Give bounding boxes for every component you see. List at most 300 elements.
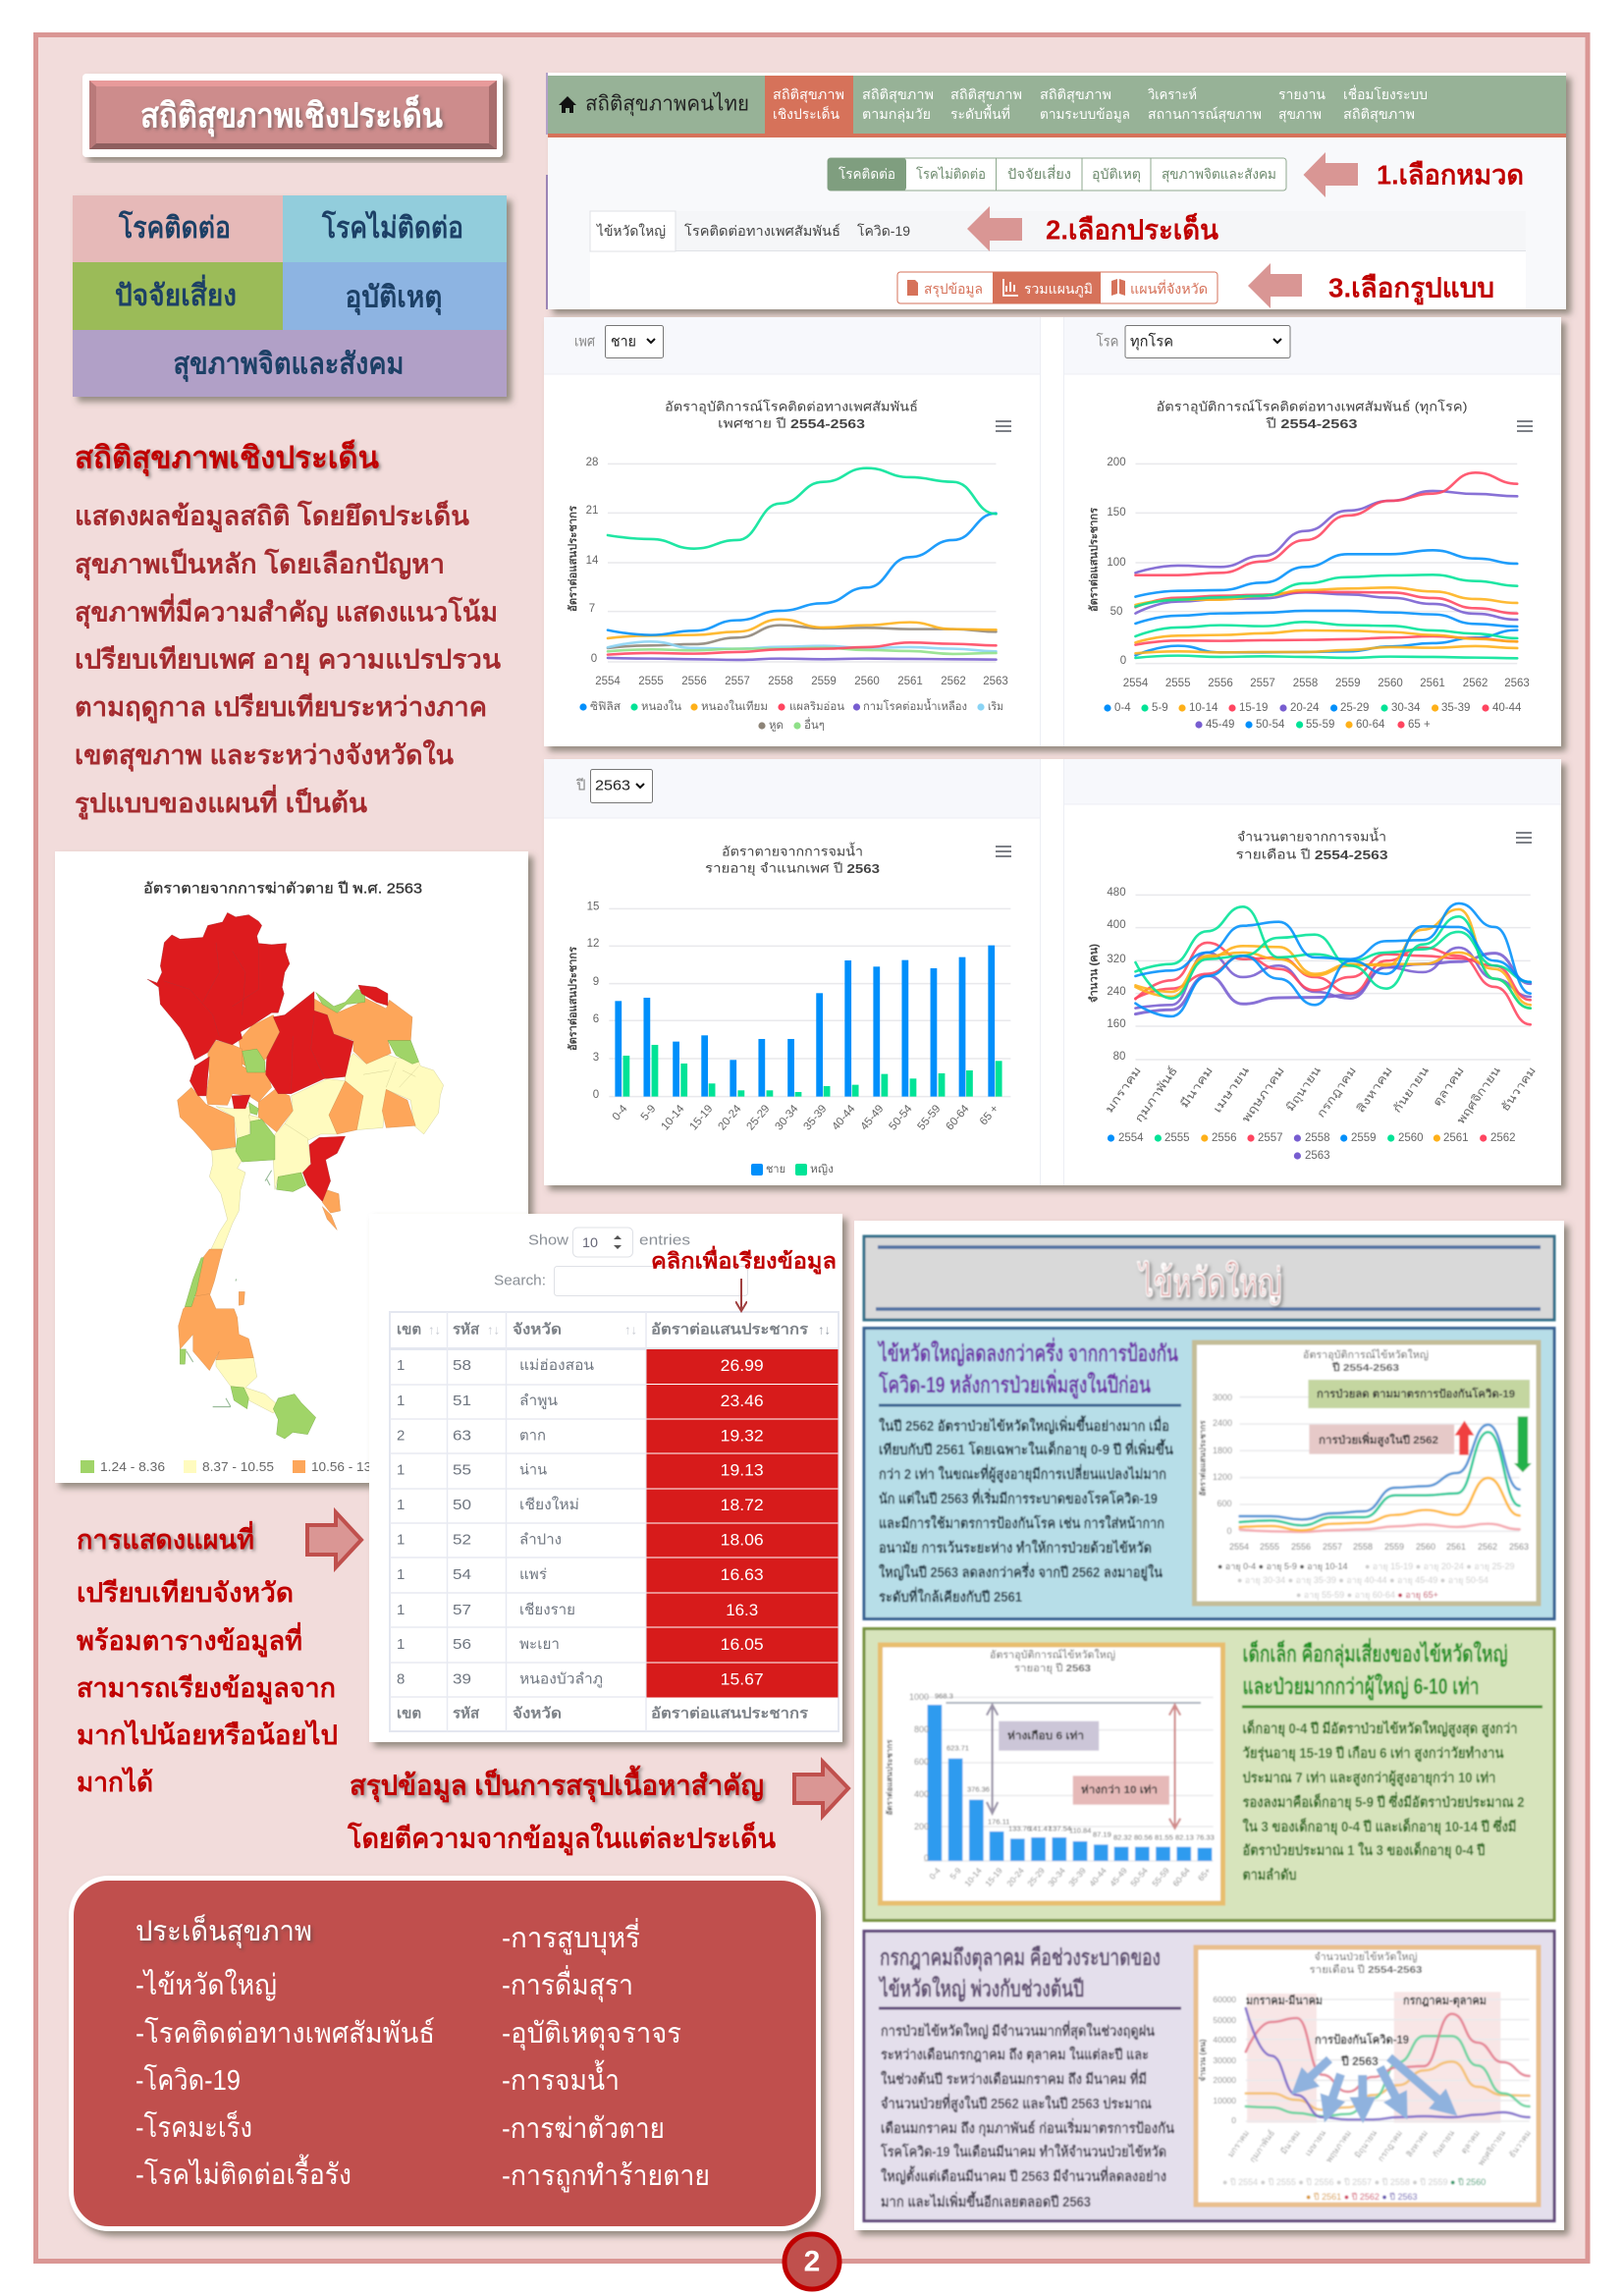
format buttons: แผนที่จังหวัด	[1130, 280, 1208, 297]
summary chart: yearly influenza: 2558	[1353, 1542, 1373, 1552]
line chart: drowning deaths by month: รายเดือน ปี 2554-2563	[1235, 847, 1388, 862]
panel: health issues list: -การดื่มสุรา	[502, 1965, 633, 2002]
summary chart: rate by age: 623.71	[947, 1744, 969, 1752]
summary chart: monthly patients: กรกฎาคม	[1376, 2128, 1404, 2163]
table: ↑↓	[818, 1322, 831, 1338]
table rows: 50	[453, 1497, 471, 1513]
summary chart: rate by age: ห่างกว่า 10 เท่า	[1081, 1784, 1158, 1796]
bar chart: drowning death rate by age: 9	[593, 976, 599, 988]
label: step 3: 3.เลือกรูปแบบ	[1328, 273, 1494, 304]
table: ↑↓	[428, 1322, 441, 1338]
summary chart: yearly influenza: 2562	[1478, 1542, 1497, 1552]
summary chart: yearly influenza: 2559	[1384, 1542, 1404, 1552]
section: seasonal peak: จำนวนป่วยที่สูงในปี 2562 และในปี 2563 ประมาณ	[881, 2093, 1152, 2112]
table rows: 8	[397, 1671, 405, 1687]
line chart: STD rate male: อัตราต่อแสนประชากร	[567, 506, 579, 612]
line chart: STD rate by age: ปี 2554-2563	[1265, 416, 1357, 430]
panel: health issues list: -ไข้หวัดใหญ่	[135, 1968, 277, 2001]
bar chart: drowning death rate by age: 0	[593, 1089, 599, 1101]
table rows: ลำปาง	[519, 1531, 562, 1548]
table rows: 39	[453, 1671, 471, 1687]
line chart: drowning deaths by month: 2563	[1305, 1150, 1330, 1162]
summary chart: monthly patients: 50000	[1213, 2015, 1236, 2025]
title button: สถิติสุขภาพเชิงประเด็น	[140, 94, 443, 137]
line chart: STD rate male: 2561	[897, 676, 923, 687]
summary chart: monthly patients: มีนาคม	[1278, 2128, 1302, 2156]
summary chart: rate by age: 0	[924, 1853, 929, 1863]
summary chart: monthly patients: เมษายน	[1303, 2128, 1327, 2158]
issue tabs card: โควิด-19	[857, 223, 910, 239]
section: seasonal peak: ไข้หวัดใหญ่ พ่วงกับช่วงต้นปี	[878, 1975, 1084, 2002]
table rows: หนองบัวลำภู	[519, 1671, 603, 1687]
intro paragraph: ตามฤดูกาล เปรียบเทียบระหว่างภาค	[75, 692, 487, 724]
line chart: drowning deaths by month: กุมภาพันธ์	[1132, 1064, 1180, 1125]
summary chart: yearly influenza: ● อายุ 0-4 ● อายุ 5-9 ● อายุ 10-14	[1217, 1561, 1348, 1572]
summary header: ไข้หวัดใหญ่	[1137, 1260, 1282, 1306]
summary chart: monthly patients: 60000	[1213, 1995, 1236, 2004]
intro paragraph: รูปแบบของแผนที่ เป็นต้น	[75, 784, 368, 820]
bar chart: drowning death rate by age: 30-34	[773, 1103, 801, 1132]
page number: 2	[804, 2245, 820, 2278]
summary chart: monthly patients: ● ปี 2561 ● ปี 2562 ● ปี 2563	[1306, 2192, 1418, 2202]
summary chart: monthly patients: กรกฎาคม-ตุลาคม	[1403, 1994, 1487, 2008]
bar chart: drowning death rate by age: 35-39	[801, 1103, 830, 1132]
panel: health issues list: -การจมน้ำ	[502, 2059, 620, 2097]
table rows: 1	[397, 1566, 405, 1583]
line chart: drowning deaths by month: 2559	[1351, 1132, 1377, 1144]
summary description	[347, 1764, 776, 1856]
line chart: drowning deaths by month: 400	[1107, 919, 1126, 931]
line chart: drowning deaths by month: กันยายน	[1391, 1065, 1432, 1116]
line chart: STD rate male: หูด	[769, 720, 784, 732]
line chart: STD rate by age: 200	[1107, 457, 1126, 468]
nav bar: สถานการณ์สุขภาพ	[1148, 106, 1262, 123]
panel: health issues list: -การฆ่าตัวตาย	[502, 2113, 665, 2145]
summary chart: rate by age: ห่างเกือบ 6 เท่า	[1007, 1729, 1084, 1742]
map legend	[81, 1459, 390, 1474]
line chart: drowning deaths by month: 240	[1107, 986, 1126, 998]
summary chart: rate by age: 176.11	[988, 1817, 1009, 1827]
gender selector: ชาย	[611, 334, 636, 350]
summary chart: rate by age: 968.3	[935, 1691, 953, 1701]
summary chart: rate by age: 35-39	[1066, 1866, 1088, 1888]
table rows: 16.63	[721, 1565, 764, 1584]
line chart: STD rate by age: 2563	[1504, 678, 1530, 689]
line chart: drowning deaths by month: 2562	[1490, 1132, 1516, 1144]
table rows: 56	[453, 1636, 471, 1653]
summary chart: rate by age: รายอายุ ปี 2563	[1014, 1662, 1091, 1674]
table rows: 19.32	[721, 1426, 764, 1446]
line chart: STD rate by age: 2556	[1208, 678, 1233, 689]
line chart: STD rate by age: 25-29	[1340, 702, 1369, 714]
summary chart: rate by age: 20-24	[1004, 1866, 1026, 1888]
panel: health issues list: -อุบัติเหตุจราจร	[502, 2018, 681, 2050]
line chart: STD rate by age: 0	[1120, 655, 1126, 667]
format buttons	[897, 272, 1217, 303]
line chart: STD rate by age: 65 +	[1408, 719, 1431, 731]
nav bar: สถิติสุขภาพคนไทย	[585, 92, 749, 116]
section: young children: ตามลำดับ	[1243, 1867, 1296, 1884]
line chart: STD rate male: แผลริมอ่อน	[789, 700, 844, 713]
summary chart: monthly patients: จำนวน (คน)	[1198, 2039, 1208, 2081]
line chart: STD rate male: 0	[591, 653, 597, 665]
line chart: drowning deaths by month: ธันวาคม	[1499, 1066, 1539, 1114]
line chart: STD rate by age: 60-64	[1356, 719, 1385, 731]
line chart: STD rate male: 2555	[638, 676, 664, 687]
line chart: STD rate by age	[1088, 399, 1533, 731]
summary chart: yearly influenza: 2400	[1213, 1418, 1232, 1428]
line chart: STD rate by age: 30-34	[1391, 702, 1421, 714]
line chart: drowning deaths by month: จำนวน (คน)	[1088, 944, 1100, 1003]
table rows: 1	[397, 1357, 405, 1374]
summary chart: monthly patients: สิงหาคม	[1404, 2128, 1430, 2159]
line chart: STD rate male: หนองในเทียม	[701, 700, 768, 713]
intro paragraph: สุขภาพเป็นหลัก โดยเลือกปัญหา	[75, 546, 445, 581]
section: young children: อัตราป่วยประมาณ 1 ใน 3 ของเด็กอายุ 0-4 ปี	[1243, 1840, 1485, 1859]
line chart: STD rate by age: 55-59	[1306, 719, 1334, 731]
section: decline from covid: อนามัย การเว้นระยะห่าง ทำให้การป่วยด้วยไข้หวัด	[879, 1539, 1152, 1557]
table rows: 26.99	[721, 1356, 764, 1375]
panel: top charts	[544, 317, 1561, 746]
table rows: 58	[453, 1357, 471, 1374]
line chart: drowning deaths by month: กรกฎาคม	[1316, 1066, 1359, 1121]
line chart: STD rate male: เริม	[988, 700, 1003, 713]
issue tabs card	[590, 211, 1526, 309]
intro heading: สถิติสุขภาพเชิงประเด็น	[75, 438, 379, 477]
title button	[82, 74, 503, 157]
line chart: drowning deaths by month: สิงหาคม	[1354, 1065, 1395, 1116]
summary chart: monthly patients: การป้องกันโควิด-19	[1315, 2032, 1409, 2047]
summary chart: rate by age: 60-64	[1170, 1866, 1192, 1888]
table rows: 1	[397, 1531, 405, 1548]
bar chart: drowning death rate by age: 0-4	[611, 1103, 630, 1123]
issue tabs card: ไข้หวัดใหญ่	[596, 223, 666, 239]
summary chart: rate by age: 600	[914, 1757, 929, 1767]
summary chart: rate by age: 50-54	[1128, 1866, 1150, 1888]
summary chart: yearly influenza: 2554	[1229, 1542, 1249, 1552]
table rows: 1	[397, 1602, 405, 1618]
section: young children: ใน 3 ของเด็กอายุ 0-4 ปี และเด็กอายุ 10-14 ปี ซึ่งมี	[1243, 1816, 1516, 1835]
arrow: select category	[1304, 152, 1358, 197]
panel: health issues list: ประเด็นสุขภาพ	[135, 1913, 312, 1948]
section: decline from covid: ใหญ่ในปี 2563 ลดลงกว่าครึ่ง จากปี 2562 ลงมาอยู่ใน	[879, 1561, 1163, 1581]
line chart: STD rate by age: 2558	[1293, 678, 1318, 689]
line chart: drowning deaths by month: มีนาคม	[1178, 1065, 1216, 1111]
table rows: 1	[397, 1461, 405, 1479]
table: จังหวัด	[513, 1322, 562, 1338]
map description: การแสดงแผนที่	[77, 1520, 254, 1555]
line chart: STD rate male: หนองใน	[641, 700, 681, 713]
summary chart: yearly influenza: ● อายุ 15-19 ● อายุ 20-24 ● อายุ 25-29	[1365, 1561, 1515, 1572]
line chart: STD rate by age: 15-19	[1239, 702, 1268, 714]
summary chart: yearly influenza: 1800	[1213, 1446, 1232, 1455]
category grid: อุบัติเหตุ	[346, 281, 442, 316]
category grid	[73, 195, 507, 397]
table rows: ลำพูน	[519, 1393, 558, 1409]
line chart: drowning deaths by month: 2554	[1118, 1132, 1144, 1144]
summary chart: monthly patients: มกราคม-มีนาคม	[1246, 1994, 1323, 2007]
line chart: STD rate by age: 2562	[1463, 678, 1488, 689]
table rows: 18.06	[721, 1530, 764, 1549]
table rows: 54	[453, 1566, 471, 1583]
table controls: entries	[639, 1231, 690, 1249]
disease selector	[1096, 326, 1290, 357]
table rows: เชียงใหม่	[519, 1496, 579, 1513]
line chart: STD rate male: 28	[586, 457, 598, 468]
summary chart: yearly influenza: 2560	[1416, 1542, 1435, 1552]
category grid: โรคไม่ติดต่อ	[321, 209, 463, 245]
line chart: STD rate by age: 35-39	[1441, 702, 1470, 714]
table rows: 1	[397, 1636, 405, 1653]
table rows: 55	[453, 1461, 471, 1479]
table: ↑↓	[624, 1322, 637, 1338]
format buttons: รวมแผนภูมิ	[1024, 281, 1093, 298]
disease selector: โรค	[1096, 332, 1119, 350]
line chart: STD rate male: 14	[586, 555, 599, 567]
summary chart: rate by age: 1000	[909, 1692, 929, 1702]
table rows: 52	[453, 1531, 471, 1548]
summary chart: rate by age: 5-9	[947, 1866, 963, 1882]
bar chart: drowning death rate by age: 20-24	[716, 1103, 744, 1132]
summary description: โดยตีความจากข้อมูลในแต่ละประเด็น	[347, 1821, 776, 1856]
year selector: 2563	[595, 778, 630, 793]
arrow: select format	[1248, 263, 1302, 308]
bar chart: drowning death rate by age: 12	[587, 938, 599, 950]
section: young children: เด็กเล็ก คือกลุ่มเสี่ยงของไข้หวัดใหญ่	[1243, 1637, 1508, 1668]
summary chart: monthly patients: ● ปี 2554 ● ปี 2555 ● ปี 2556 ● ปี 2557 ● ปี 2558 ● ปี 2559 ● ปี 2560	[1222, 2177, 1486, 2187]
section: seasonal peak: มาก และไม่เพิ่มขึ้นอีกเลยตลอดปี 2563	[881, 2191, 1091, 2211]
map description: มากไปน้อยหรือน้อยไป	[77, 1720, 338, 1750]
summary chart: yearly influenza: 2555	[1260, 1542, 1279, 1552]
summary chart: rate by age: 25-29	[1025, 1866, 1047, 1888]
summary chart: monthly patients: 20000	[1213, 2075, 1236, 2085]
summary chart: monthly patients: มกราคม	[1225, 2128, 1251, 2159]
table: เขต	[397, 1322, 421, 1338]
section: decline from covid: โควิด-19 หลังการป่วยเพิ่มสูงในปีก่อน	[878, 1368, 1151, 1399]
section: seasonal peak: โรคโควิด-19 ในเดือนมีนาคม ทำให้จำนวนป่วยไข้หวัด	[880, 2143, 1166, 2160]
year selector	[575, 770, 652, 803]
line chart: STD rate by age: 100	[1107, 557, 1126, 569]
bar chart: drowning death rate by age: หญิง	[810, 1163, 834, 1175]
summary chart: monthly patients: พฤศจิกายน	[1476, 2128, 1507, 2167]
line chart: drowning deaths by month: มิถุนายน	[1283, 1065, 1324, 1114]
map description: มากได้	[77, 1767, 153, 1797]
summary chart: yearly influenza: อัตราต่อแสนประชากร	[1198, 1420, 1208, 1497]
section: young children: และป่วยมากกว่าผู้ใหญ่ 6-10 เท่า	[1243, 1672, 1479, 1701]
summary chart: rate by age: 55-59	[1150, 1866, 1171, 1888]
bar chart: drowning death rate by age: 6	[593, 1013, 599, 1025]
table: ↑↓	[487, 1322, 500, 1338]
map legend: 10.56 - 13.92	[311, 1459, 390, 1474]
year selector: ปี	[575, 778, 586, 793]
disease selector: ทุกโรค	[1130, 332, 1173, 352]
choropleth map	[147, 912, 444, 1439]
section: seasonal peak: การป่วยไข้หวัดใหญ่ มีจำนวนมากที่สุดในช่วงฤดูฝน	[881, 2020, 1155, 2040]
line chart: STD rate male	[567, 399, 1011, 732]
section: decline from covid	[864, 1328, 1554, 1618]
summary chart: yearly influenza: 0	[1226, 1526, 1232, 1536]
panel: health issues list: -โควิด-19	[135, 2063, 241, 2097]
map description: เปรียบเทียบจังหวัด	[77, 1578, 294, 1608]
summary chart: yearly influenza: ● อายุ 30-34 ● อายุ 35-39 ● อายุ 40-44 ● อายุ 45-49 ● อายุ 50-54	[1237, 1575, 1488, 1586]
nav bar: เชื่อมโยงระบบ	[1343, 85, 1428, 102]
summary chart: yearly influenza: 600	[1217, 1499, 1232, 1508]
summary chart: rate by age: 80.56	[1134, 1832, 1153, 1842]
section: decline from covid: ในปี 2562 อัตราป่วยไข้หวัดใหญ่เพิ่มขึ้นอย่างมาก เมื่อ	[879, 1415, 1169, 1435]
map description: สามารถเรียงข้อมูลจาก	[77, 1673, 336, 1705]
summary chart: monthly patients: รายเดือน ปี 2554-2563	[1310, 1963, 1423, 1976]
line chart: drowning deaths by month: 2556	[1212, 1132, 1237, 1144]
summary chart: rate by age: 110.84	[1069, 1827, 1091, 1834]
summary chart: rate by age: 65+	[1196, 1866, 1213, 1883]
line chart: STD rate male: 7	[589, 603, 595, 615]
line chart: STD rate male: ซิฟิลิส	[590, 700, 621, 713]
summary chart: yearly influenza: 2557	[1323, 1542, 1342, 1552]
summary chart: monthly patients: กุมภาพันธ์	[1247, 2128, 1277, 2164]
line chart: STD rate by age: 2555	[1165, 678, 1190, 689]
summary chart: monthly patients: 40000	[1213, 2035, 1236, 2045]
section: young children	[864, 1628, 1554, 1921]
summary chart: rate by age: 10-14	[962, 1866, 984, 1888]
section: decline from covid: เทียบกับปี 2561 โดยเฉพาะในเด็กอายุ 0-9 ปี ที่เพิ่มขึ้น	[879, 1439, 1173, 1458]
section: seasonal peak: กรกฎาคมถึงตุลาคม คือช่วงระบาดของ	[880, 1944, 1161, 1972]
section: young children: ประมาณ 7 เท่า และสูงกว่าผู้สูงอายุกว่า 10 เท่า	[1243, 1770, 1496, 1786]
table rows: 57	[453, 1602, 471, 1618]
line chart: STD rate male: อัตราอุบัติการณ์โรคติดต่อทางเพศสัมพันธ์	[665, 399, 918, 414]
line chart: drowning deaths by month: 2557	[1258, 1132, 1283, 1144]
summary chart: monthly patients: มิถุนายน	[1352, 2128, 1380, 2160]
summary chart: rate by age: 40-44	[1087, 1866, 1109, 1888]
intro paragraph	[75, 499, 502, 820]
category buttons: สุขภาพจิตและสังคม	[1162, 166, 1276, 183]
summary chart: monthly patients: ตุลาคม	[1459, 2128, 1483, 2156]
line chart: drowning deaths by month: 2555	[1164, 1132, 1190, 1144]
table rows: 1	[397, 1393, 405, 1409]
line chart: STD rate male: 2559	[811, 676, 837, 687]
bar chart: drowning death rate by age: อัตราต่อแสนประชากร	[567, 947, 579, 1051]
nav bar: สุขภาพ	[1278, 106, 1322, 123]
nav bar: สถิติสุขภาพ	[1040, 86, 1111, 103]
panel: website navigation screenshot	[546, 73, 1566, 309]
bar chart: drowning death rate by age: 65 +	[978, 1103, 1001, 1127]
summary chart: monthly patients: 10000	[1213, 2096, 1236, 2105]
panel: health issues list: -โรคติดต่อทางเพศสัมพันธ์	[135, 2016, 435, 2050]
line chart: STD rate male: 2562	[941, 676, 966, 687]
table rows: 2	[397, 1428, 405, 1444]
gender selector: เพศ	[574, 334, 595, 350]
map legend: 1.24 - 8.36	[100, 1459, 165, 1474]
bar chart: drowning death rate by age: 15	[587, 902, 599, 913]
line chart: drowning deaths by month: พฤษภาคม	[1240, 1066, 1287, 1125]
line chart: STD rate male: เพศชาย ปี 2554-2563	[718, 416, 865, 430]
section: young children: วัยรุ่นอายุ 15-19 ปี เกือบ 6 เท่า สูงกว่าวัยทำงาน	[1243, 1745, 1504, 1762]
summary chart: monthly patients: 0	[1231, 2115, 1236, 2125]
summary chart: rate by age: 141.47	[1029, 1825, 1052, 1832]
summary chart: rate by age: 82.13	[1175, 1832, 1194, 1842]
summary chart: rate by age: 45-49	[1108, 1866, 1129, 1888]
nav bar: วิเคราะห์	[1148, 86, 1197, 102]
line chart: drowning deaths by month: 160	[1107, 1018, 1126, 1030]
line chart: drowning deaths by month: 2560	[1398, 1132, 1424, 1144]
table controls: 10	[582, 1234, 598, 1250]
line chart: STD rate by age: 20-24	[1290, 702, 1320, 714]
table rows: 16.05	[721, 1635, 764, 1654]
section: decline from covid: กว่า 2 เท่า ในขณะที่ผู้สูงอายุมีการเปลี่ยนแปลงไม่มาก	[879, 1463, 1166, 1483]
summary chart: rate by age: 0-4	[927, 1866, 943, 1882]
line chart: drowning deaths by month: 2561	[1443, 1132, 1469, 1144]
click to sort note: คลิกเพื่อเรียงข้อมูล	[651, 1245, 837, 1275]
section: decline from covid: และมีการใช้มาตรการป้องกันโรค เช่น การใส่หน้ากาก	[879, 1514, 1164, 1532]
line chart: STD rate by age: 45-49	[1206, 719, 1234, 731]
table rows: 51	[453, 1393, 471, 1409]
table rows: น่าน	[519, 1461, 547, 1479]
table rows: 1	[397, 1497, 405, 1513]
summary chart: monthly patients: ธันวาคม	[1507, 2128, 1533, 2159]
category grid: ปัจจัยเสี่ยง	[115, 274, 237, 312]
table: อัตราต่อแสนประชากร	[651, 1322, 809, 1338]
intro paragraph: สุขภาพที่มีความสำคัญ แสดงแนวโน้ม	[75, 593, 498, 629]
line chart: STD rate male: กามโรคต่อมน้ำเหลือง	[863, 698, 967, 713]
summary description: สรุปข้อมูล เป็นการสรุปเนื้อหาสำคัญ	[350, 1764, 764, 1803]
summary chart: yearly influenza	[1194, 1342, 1539, 1604]
bar chart: drowning death rate by age: 55-59	[915, 1103, 944, 1132]
category buttons: ปัจจัยเสี่ยง	[1007, 165, 1071, 182]
line chart: STD rate male: 2556	[681, 676, 707, 687]
table rows: 16.3	[726, 1601, 758, 1619]
category buttons: โรคไม่ติดต่อ	[916, 166, 986, 182]
line chart: STD rate by age: 10-14	[1189, 702, 1218, 714]
summary chart: monthly patients: จำนวนป่วยไข้หวัดใหญ่	[1314, 1950, 1418, 1963]
summary chart: rate by age: 76.33	[1196, 1832, 1215, 1842]
section: decline from covid: ระดับที่ใกล้เคียงกับปี 2561	[879, 1586, 1022, 1606]
table rows: 15.67	[721, 1669, 764, 1689]
panel: health issues list: -โรคมะเร็ง	[135, 2109, 252, 2144]
summary chart: yearly influenza: 2561	[1446, 1542, 1466, 1552]
nav bar: เชิงประเด็น	[773, 105, 839, 122]
line chart: drowning deaths by month	[1088, 827, 1539, 1162]
table rows: 18.72	[721, 1496, 764, 1514]
summary chart: yearly influenza: การป่วยลด ตามมาตรการป้องกันโควิด-19	[1317, 1387, 1515, 1400]
line chart: STD rate by age: 2561	[1420, 678, 1445, 689]
line chart: STD rate male: อื่นๆ	[804, 717, 825, 732]
line chart: drowning deaths by month: 480	[1107, 887, 1126, 899]
summary chart: rate by age: 137.54	[1049, 1825, 1071, 1832]
table: เขต	[397, 1705, 421, 1722]
line chart: drowning deaths by month: 2558	[1305, 1132, 1330, 1144]
bar chart: drowning death rate by age: ชาย	[766, 1164, 785, 1175]
summary chart: rate by age: 800	[914, 1724, 929, 1734]
line chart: STD rate by age: 2557	[1250, 678, 1275, 689]
nav bar: สถิติสุขภาพ	[773, 86, 844, 103]
line chart: STD rate male: 2563	[983, 676, 1008, 687]
nav bar: ตามระบบข้อมูล	[1040, 106, 1130, 123]
intro paragraph: เปรียบเทียบเพศ อายุ ความแปรปรวน	[75, 644, 502, 676]
panel: health issues list: -การสูบบุหรี่	[502, 1918, 640, 1955]
map description	[77, 1520, 338, 1797]
summary chart: rate by age: 87.19	[1093, 1831, 1111, 1838]
line chart: STD rate by age: 2559	[1335, 678, 1361, 689]
line chart: STD rate male: 2557	[725, 676, 750, 687]
summary chart: yearly influenza: 2563	[1509, 1542, 1529, 1552]
line chart: STD rate by age: 2554	[1123, 678, 1149, 689]
summary chart: yearly influenza: ● อายุ 55-59 ● อายุ 60-64 ● อายุ 65+	[1296, 1590, 1438, 1601]
bar chart: drowning death rate by age: 3	[593, 1052, 599, 1064]
table rows: ตาก	[519, 1428, 546, 1444]
summary chart: yearly influenza: การป่วยเพิ่มสูงในปี 2562	[1319, 1432, 1438, 1448]
table rows: พะเยา	[519, 1636, 560, 1653]
line chart: STD rate by age: 150	[1107, 507, 1126, 519]
section: seasonal peak	[864, 1931, 1554, 2221]
